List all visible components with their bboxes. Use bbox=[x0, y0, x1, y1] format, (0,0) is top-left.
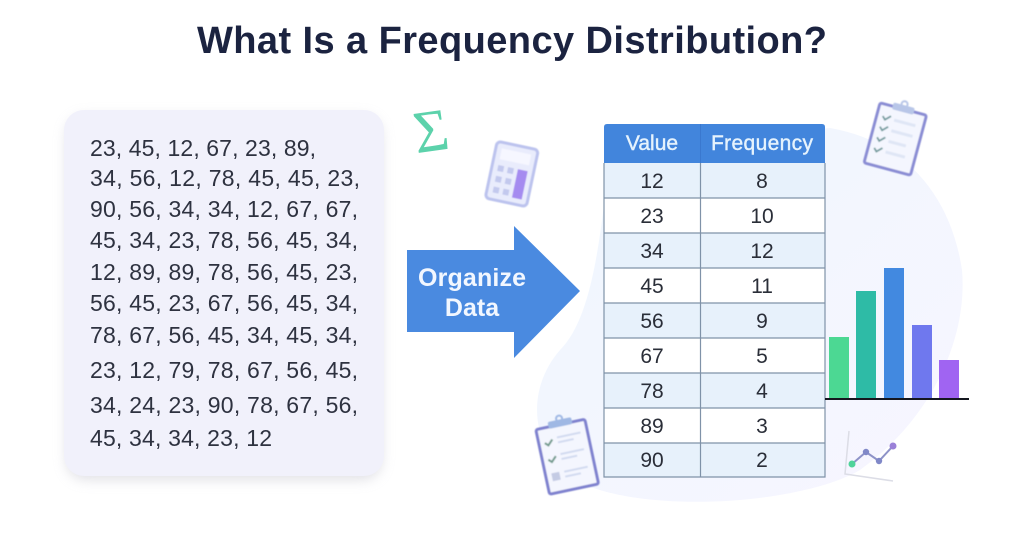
table rows: 12 bbox=[750, 240, 774, 263]
table header bbox=[604, 124, 825, 163]
background blob bbox=[537, 128, 963, 502]
table rows: 67 bbox=[640, 345, 664, 368]
arrow: organize data: Data bbox=[445, 294, 500, 322]
table rows: 8 bbox=[756, 170, 768, 193]
icon: line chart bbox=[845, 431, 896, 481]
raw data numbers: 45, 34, 23, 78, 56, 45, 34, bbox=[90, 227, 358, 253]
icon: clipboard bottom left bbox=[534, 410, 599, 494]
table header: Value bbox=[626, 132, 678, 155]
table rows: 90 bbox=[640, 449, 664, 472]
raw data numbers: 78, 67, 56, 45, 34, 45, 34, bbox=[90, 322, 358, 348]
raw data numbers: 56, 45, 23, 67, 56, 45, 34, bbox=[90, 290, 358, 316]
table rows: 34 bbox=[640, 240, 664, 263]
table rows: 2 bbox=[756, 449, 768, 472]
icon: calculator bbox=[485, 141, 538, 207]
panel: raw data bbox=[64, 110, 384, 480]
table rows: 5 bbox=[756, 345, 768, 368]
raw data numbers: 34, 24, 23, 90, 78, 67, 56, bbox=[90, 392, 358, 418]
title: What Is a Frequency Distribution? bbox=[197, 20, 827, 62]
table rows: 89 bbox=[640, 415, 664, 438]
table rows: 11 bbox=[751, 275, 773, 298]
table header: Frequency bbox=[711, 132, 814, 155]
icon: sigma: Σ bbox=[409, 96, 453, 166]
arrow: organize data: Organize bbox=[418, 264, 526, 292]
table rows: 56 bbox=[640, 310, 664, 333]
table rows: 4 bbox=[756, 380, 768, 403]
table rows: 12 bbox=[640, 170, 664, 193]
raw data numbers: 45, 34, 34, 23, 12 bbox=[90, 425, 272, 451]
table rows: 9 bbox=[756, 310, 768, 333]
table rows: 45 bbox=[640, 275, 664, 298]
icon: clipboard top right bbox=[864, 95, 929, 175]
raw data numbers: 34, 56, 12, 78, 45, 45, 23, bbox=[90, 165, 360, 191]
table rows: 78 bbox=[640, 380, 664, 403]
table rows bbox=[604, 163, 825, 477]
table rows: 23 bbox=[640, 205, 664, 228]
bar chart bbox=[825, 268, 969, 399]
arrow: organize data bbox=[407, 226, 580, 358]
raw data numbers: 23, 12, 79, 78, 67, 56, 45, bbox=[90, 357, 358, 383]
raw data numbers: 12, 89, 89, 78, 56, 45, 23, bbox=[90, 259, 358, 285]
raw data numbers: 90, 56, 34, 34, 12, 67, 67, bbox=[90, 196, 358, 222]
raw data numbers: 23, 45, 12, 67, 23, 89, bbox=[90, 135, 316, 161]
table rows: 3 bbox=[756, 415, 768, 438]
table rows: 10 bbox=[750, 205, 774, 228]
raw data numbers bbox=[90, 135, 360, 451]
frequency table bbox=[604, 124, 825, 477]
